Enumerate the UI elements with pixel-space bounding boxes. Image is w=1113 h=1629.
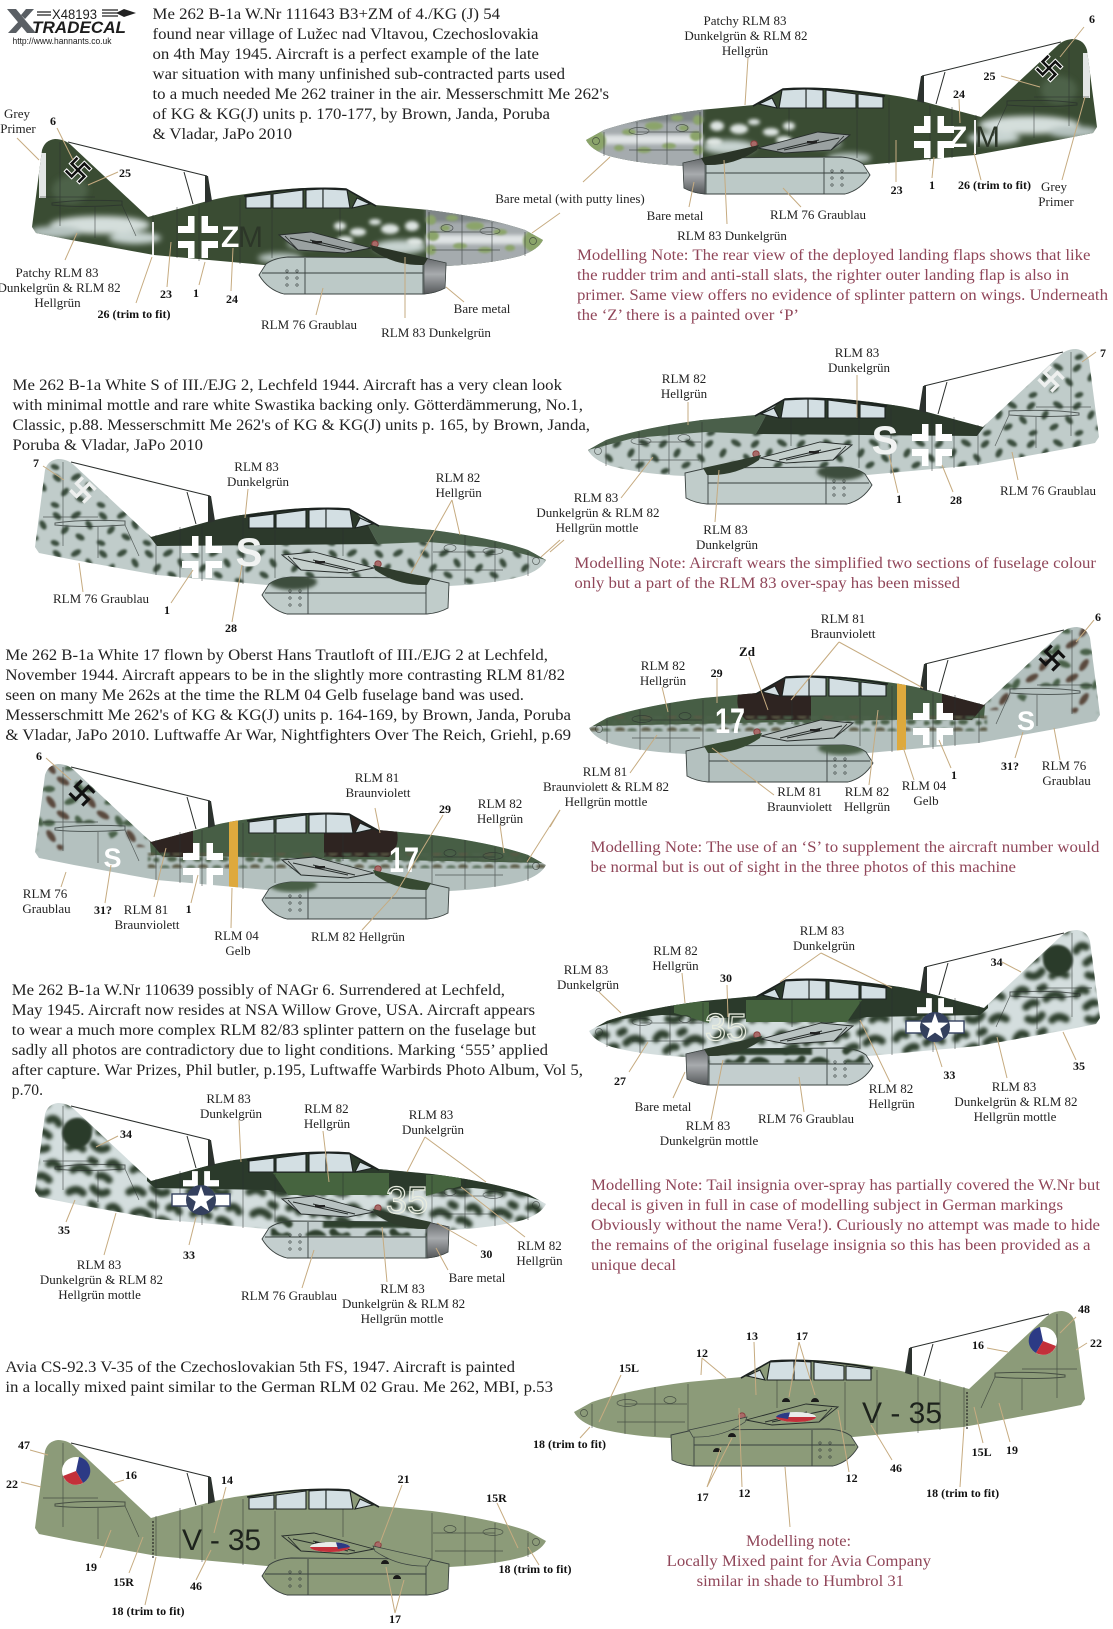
label: 15L tail: 15L <box>972 1445 992 1459</box>
label: mottle rear: Hellgrün mottle <box>974 1109 1057 1124</box>
leader lines <box>17 128 560 318</box>
label: RLM 81 top: RLM 81 <box>821 611 865 626</box>
label: RLM 76: RLM 76 Graublau <box>758 1111 855 1126</box>
label: 18 trim nose: 18 (trim to fit) <box>533 1437 606 1451</box>
logo: Xtradecal: X48193 <box>52 6 97 22</box>
text block: aircraft 7 description: May 1945. Aircraft now resides at NSA Willow Grove, USA. Aircraft appears <box>12 1002 535 1019</box>
label: RLM 83 top: Dunkelgrün <box>793 938 856 953</box>
label: mottle: Hellgrün mottle <box>565 794 648 809</box>
label: mottle: Hellgrün mottle <box>556 520 639 535</box>
callouts: aircraft 5 <box>22 749 560 958</box>
aircraft 2: B3+ZM facing left <box>583 39 1100 194</box>
label: grey primer: Primer <box>0 121 36 136</box>
text block: aircraft 9 description <box>5 1359 553 1396</box>
label: RLM 81: Braunviolett <box>346 785 411 800</box>
text block: aircraft 1 description: found near village of Lužec nad Vltavou, Czechoslovakia <box>152 26 538 43</box>
label: RLM 04: RLM 04 <box>214 928 259 943</box>
label: RLM 82 lower: RLM 82 Hellgrün <box>311 929 405 944</box>
label: 7: 7 <box>1100 346 1106 360</box>
leader lines <box>550 352 1096 552</box>
text block: aircraft 3 description: Classic, p.88. Messerschmitt Me 262's of KG & KG(J) units p. 165, by Brown, Janda, <box>12 417 590 434</box>
aircraft 2: B3+ZM facing left: Z <box>949 121 967 154</box>
label: RLM 81 top: Braunviolett <box>810 626 876 641</box>
label: patchy: Patchy RLM 83 <box>703 13 787 28</box>
label: Zd: Zd <box>739 644 756 659</box>
callouts: aircraft 10 <box>533 1302 1102 1527</box>
label: mottle: RLM 81 <box>583 764 627 779</box>
aircraft 7: 35 in US markings facing right: 35 <box>386 1180 428 1222</box>
label: 25: 25 <box>984 69 996 83</box>
label: mottle: RLM 83 <box>574 490 618 505</box>
label: 27: 27 <box>614 1074 626 1088</box>
aircraft 8: 35 in US markings facing left: 35 <box>705 1007 747 1049</box>
aircraft 1: B3+ZM facing right: M <box>238 221 263 254</box>
label: RLM 76: RLM 76 Graublau <box>261 317 358 332</box>
leader lines <box>66 1120 525 1288</box>
aircraft 8: 35 in US markings facing left <box>582 926 1102 1085</box>
callouts: aircraft 9 <box>6 1438 571 1626</box>
text block: aircraft 1 description: of KG & KG(J) units p. 170-177, by Brown, Janda, Poruba <box>152 106 550 123</box>
modelling note 4 <box>591 1177 1101 1274</box>
aircraft 3: White S facing right: S <box>236 531 262 575</box>
modelling note 1: the rudder trim and anti-stall slats, the righter outer landing flap is also in <box>577 267 1069 284</box>
label: RLM 82 nose: Hellgrün <box>516 1253 563 1268</box>
label: RLM 82 top: Hellgrün <box>640 673 687 688</box>
label: RLM 76: RLM 76 Graublau <box>241 1288 338 1303</box>
text block: aircraft 1 description: & Vladar, JaPo 2010 <box>152 126 292 143</box>
label: 17: 17 <box>389 1612 401 1626</box>
modelling note 2 <box>574 555 1097 592</box>
label: 18 trim nose: 18 (trim to fit) <box>499 1562 571 1576</box>
label: 23: 23 <box>160 287 172 301</box>
modelling note 4: the remains of the original fuselage insignia so this has been provided as a <box>591 1237 1090 1254</box>
label: mottle rear: Hellgrün mottle <box>58 1287 141 1302</box>
label: RLM 83 nose: RLM 83 <box>564 962 608 977</box>
label: RLM 76: Graublau <box>1042 773 1091 788</box>
aircraft 5: White 17 facing right <box>33 760 550 919</box>
leader lines <box>583 27 1085 224</box>
aircraft 6: White 17 facing left <box>585 623 1102 782</box>
text block: aircraft 3 description: Poruba & Vladar, JaPo 2010 <box>12 437 203 454</box>
label: RLM 82: RLM 82 <box>436 470 480 485</box>
label: 25: 25 <box>119 166 131 180</box>
label: RLM 04: Gelb <box>225 943 251 958</box>
label: RLM 76: RLM 76 <box>23 886 67 901</box>
label: 13: 13 <box>746 1329 758 1343</box>
label: 24: 24 <box>953 87 965 101</box>
label: 22: 22 <box>1090 1336 1102 1350</box>
label: patchy: Hellgrün <box>34 295 81 310</box>
label: mottle rear: Dunkelgrün & RLM 82 <box>40 1272 163 1287</box>
modelling note 5 <box>667 1533 931 1590</box>
leader lines <box>43 466 560 622</box>
label: RLM 83 nose: Dunkelgrün <box>557 977 620 992</box>
text block: aircraft 5 description: & Vladar, JaPo 2010. Luftwaffe Ar War, Nightfighters Over The Reich, Griehl, p.69 <box>5 727 571 744</box>
text block: aircraft 7 description: to wear a much more complex RLM 82/83 splinter pattern on the fuselage but <box>12 1022 537 1039</box>
leader lines <box>21 1450 539 1613</box>
label: RLM 83 mottle: RLM 83 <box>686 1118 730 1133</box>
modelling note 3: Modelling Note: The use of an ‘S’ to supplement the aircraft number would <box>590 839 1099 856</box>
text block: aircraft 1 description: to a much needed Me 262 trainer in the air. Messerschmitt Me 262's <box>152 86 609 103</box>
text block: aircraft 3 description <box>12 377 590 454</box>
callouts: aircraft 1 <box>0 106 645 340</box>
label: RLM 82: RLM 82 <box>478 796 522 811</box>
label: RLM 04: Gelb <box>913 793 939 808</box>
modelling note 3 <box>590 839 1099 876</box>
aircraft 6: White 17 facing left: 17 <box>715 702 745 741</box>
aircraft 10: Avia V-35 facing left: V - 35 <box>862 1397 942 1430</box>
label: RLM 83: Dunkelgrün <box>828 360 891 375</box>
label: 12 wing: 12 <box>846 1471 858 1485</box>
label: patchy: Patchy RLM 83 <box>15 265 99 280</box>
label: 6: 6 <box>50 114 56 128</box>
label: 35: 35 <box>1073 1059 1085 1073</box>
label: RLM 82 first: RLM 82 <box>304 1101 349 1116</box>
label: RLM 83: RLM 83 Dunkelgrün <box>381 325 491 340</box>
aircraft 7: 35 in US markings facing right <box>33 1099 553 1258</box>
text block: aircraft 1 description: Me 262 B-1a W.Nr 111643 B3+ZM of 4./KG (J) 54 <box>152 6 500 23</box>
label: 16: 16 <box>972 1338 984 1352</box>
logo: Xtradecal: TRADECAL <box>32 18 126 37</box>
label: bare metal: Bare metal <box>449 1270 506 1285</box>
callouts: aircraft 6 <box>543 610 1101 827</box>
leader lines <box>46 758 560 930</box>
aircraft 1: B3+ZM facing right: Z <box>221 221 239 254</box>
text block: aircraft 5 description: seen on many Me 262s at the time the RLM 04 Gelb fuselage band was used. <box>5 687 524 704</box>
modelling note 1: Modelling Note: The rear view of the deployed landing flaps shows that like <box>577 247 1090 264</box>
label: 1: 1 <box>929 178 935 192</box>
modelling note 1: primer. Same view offers no evidence of splinter pattern on wings. Underneath <box>577 287 1108 304</box>
logo: Xtradecal: http://www.hannants.co.uk <box>12 36 112 46</box>
label: 7: 7 <box>33 456 39 470</box>
label: mottle: Dunkelgrün & RLM 82 <box>536 505 660 520</box>
label: 29: 29 <box>439 802 451 816</box>
aircraft 9: Avia V-35 facing right: V - 35 <box>182 1524 261 1557</box>
text block: aircraft 7 description: p.70. <box>12 1082 43 1099</box>
label: RLM 83 second: Dunkelgrün <box>402 1122 465 1137</box>
label: 1: 1 <box>896 492 902 506</box>
aircraft 5: White 17 facing right: S <box>103 843 122 873</box>
label: 6: 6 <box>36 749 42 763</box>
label: RLM 82 nose: RLM 82 <box>517 1238 562 1253</box>
modelling note 1: the ‘Z’ there is a painted over ‘P’ <box>577 307 799 324</box>
aircraft 4: White S facing left: S <box>872 419 898 463</box>
modelling note 2: Modelling Note: Aircraft wears the simplified two sections of fuselage colour <box>574 555 1097 572</box>
modelling note 5: Modelling note: <box>746 1533 851 1550</box>
label: RLM 82 lower: RLM 82 <box>869 1081 913 1096</box>
text block: aircraft 1 description <box>152 6 609 143</box>
label: 6: 6 <box>1089 12 1095 26</box>
modelling note 1 <box>577 247 1108 324</box>
label: bare metal: Bare metal <box>454 301 511 316</box>
label: 30: 30 <box>480 1247 492 1261</box>
label: mottle: Braunviolett & RLM 82 <box>543 779 669 794</box>
label: 31?: 31? <box>1001 759 1019 773</box>
text block: aircraft 3 description: with minimal mottle and rare white Swastika backing only. Götterdämmerung, No.1, <box>12 397 583 414</box>
label: RLM 83 lower: RLM 83 <box>703 522 748 537</box>
leader lines <box>599 953 1076 1120</box>
label: 17 top: 17 <box>796 1329 808 1343</box>
callouts: aircraft 4 <box>550 345 1106 552</box>
label: 12 top: 12 <box>696 1346 708 1360</box>
label: 46: 46 <box>190 1579 202 1593</box>
label: RLM 04: RLM 04 <box>902 778 946 793</box>
aircraft 2: B3+ZM facing left: M <box>975 121 1000 154</box>
label: RLM 83 first: RLM 83 <box>206 1091 251 1106</box>
aircraft 9: Avia V-35 facing right <box>35 1440 546 1595</box>
modelling note 4: Obviously without the name Vera!). Curiously no attempt was made to hide <box>591 1217 1100 1234</box>
aircraft 3: White S facing right <box>33 455 553 614</box>
label: RLM 82 lower: Hellgrün <box>868 1096 915 1111</box>
text block: aircraft 1 description: war situation with many unfinished sub-contracted parts used <box>152 66 565 83</box>
label: RLM 82 top: RLM 82 <box>653 943 698 958</box>
label: 18 trim tail: 18 (trim to fit) <box>926 1486 999 1500</box>
callouts: aircraft 8 <box>557 923 1085 1148</box>
text block: aircraft 5 description: Me 262 B-1a White 17 flown by Oberst Hans Trautloft of III./EJG 2 at Lechfeld, <box>5 647 548 664</box>
label: 29: 29 <box>711 666 723 680</box>
label: mottle rear: Dunkelgrün & RLM 82 <box>954 1094 1078 1109</box>
label: 33: 33 <box>943 1068 955 1082</box>
label: RLM 83: RLM 83 <box>835 345 879 360</box>
text block: aircraft 7 description <box>12 982 583 1099</box>
label: RLM 82 lower: Hellgrün <box>844 799 891 814</box>
label: mottle engine: Hellgrün mottle <box>361 1311 444 1326</box>
label: grey primer: Grey <box>4 106 30 121</box>
label: 23: 23 <box>891 183 903 197</box>
label: RLM 82 top: Hellgrün <box>652 958 699 973</box>
modelling note 4: Modelling Note: Tail insignia over-spray has partially covered the W.Nr but <box>591 1177 1101 1194</box>
label: 34: 34 <box>991 955 1003 969</box>
modelling note 4: unique decal <box>591 1257 677 1274</box>
text block: aircraft 5 description: Messerschmitt Me 262's of KG & KG(J) units p. 164-169, by Brown, Janda, Poruba <box>5 707 571 724</box>
label: RLM 76: RLM 76 <box>1042 758 1086 773</box>
label: RLM 83 mottle: Dunkelgrün mottle <box>660 1133 759 1148</box>
label: RLM 82: Hellgrün <box>661 386 708 401</box>
label: 30: 30 <box>720 971 732 985</box>
label: RLM 82 first: Hellgrün <box>304 1116 351 1131</box>
label: RLM 81 lower: RLM 81 <box>124 902 168 917</box>
aircraft 1: B3+ZM facing right <box>29 139 546 294</box>
callouts: aircraft 3 <box>33 456 660 635</box>
label: 17 lower: 17 <box>697 1490 709 1504</box>
text block: aircraft 1 description: on 4th May 1945. Aircraft is a perfect example of the late <box>152 46 539 63</box>
label: RLM 81 lower: Braunviolett <box>114 917 180 932</box>
label: 26: 26 (trim to fit) <box>98 307 170 321</box>
label: RLM 81 lower: RLM 81 <box>777 784 822 799</box>
label: RLM 76: RLM 76 Graublau <box>53 591 150 606</box>
label: 12 lower: 12 <box>738 1486 750 1500</box>
text block: aircraft 7 description: Me 262 B-1a W.Nr 110639 possibly of NAGr 6. Surrendered at Lechfeld, <box>12 982 505 999</box>
text block: aircraft 9 description: Avia CS-92.3 V-35 of the Czechoslovakian 5th FS, 1947. Aircraft is painted <box>5 1359 515 1376</box>
label: mottle engine: RLM 83 <box>380 1281 425 1296</box>
label: RLM 76: RLM 76 Graublau <box>1000 483 1097 498</box>
label: 6: 6 <box>1095 610 1101 624</box>
text block: aircraft 5 description <box>5 647 571 744</box>
label: 14: 14 <box>221 1473 233 1487</box>
modelling note 5: similar in shade to Humbrol 31 <box>697 1573 904 1590</box>
label: 28: 28 <box>950 493 962 507</box>
label: RLM 83 second: RLM 83 <box>409 1107 453 1122</box>
text block: aircraft 7 description: after capture. War Prizes, Phil butler, p.195, Luftwaffe Warbirds Photo Album, Vol 5, <box>12 1062 583 1079</box>
label: 22: 22 <box>6 1477 18 1491</box>
modelling note 2: only but a part of the RLM 83 over-spay has been missed <box>574 575 960 592</box>
label: patchy: Dunkelgrün & RLM 82 <box>684 28 808 43</box>
label: 28: 28 <box>225 621 237 635</box>
label: RLM 82: Hellgrün <box>477 811 524 826</box>
label: 19: 19 <box>1006 1443 1018 1457</box>
label: 15L nose: 15L <box>619 1361 639 1375</box>
leader lines <box>580 1317 1087 1527</box>
label: RLM 83 first: Dunkelgrün <box>200 1106 263 1121</box>
modelling note 4: decal is given in full in case of modelling subject in German markings <box>591 1197 1063 1214</box>
label: 31?: 31? <box>94 903 112 917</box>
label: RLM 82: RLM 82 <box>662 371 706 386</box>
label: patchy: Hellgrün <box>722 43 769 58</box>
label: 16: 16 <box>125 1468 137 1482</box>
label: grey primer: Grey <box>1041 179 1067 194</box>
label: grey primer: Primer <box>1038 194 1074 209</box>
text block: aircraft 7 description: sadly all photos are contradictory due to light conditions. Marking ‘555’ applied <box>12 1042 548 1059</box>
label: 19: 19 <box>85 1560 97 1574</box>
label: bare metal: Bare metal <box>635 1099 692 1114</box>
label: 1: 1 <box>951 768 957 782</box>
label: 15R nose: 15R <box>486 1491 507 1505</box>
label: bare metal: Bare metal <box>647 208 704 223</box>
label: 1: 1 <box>186 902 192 916</box>
text block: aircraft 5 description: November 1944. Aircraft appears to be in the slightly more contrasting RLM 81/82 <box>5 667 565 684</box>
label: 26: 26 (trim to fit) <box>958 178 1031 192</box>
label: RLM 83 top: RLM 83 <box>800 923 844 938</box>
label: 47: 47 <box>18 1438 30 1452</box>
label: RLM 81: RLM 81 <box>355 770 399 785</box>
leader lines <box>550 620 1094 827</box>
logo: Xtradecal <box>7 6 136 46</box>
label: mottle engine: Dunkelgrün & RLM 82 <box>342 1296 465 1311</box>
label: 1: 1 <box>164 603 170 617</box>
label: RLM 82 lower: RLM 82 <box>845 784 889 799</box>
label: RLM 83: RLM 83 Dunkelgrün <box>677 228 787 243</box>
text block: aircraft 3 description: Me 262 B-1a White S of III./EJG 2, Lechfeld 1944. Aircraft has a very clean look <box>12 377 562 394</box>
label: RLM 76: RLM 76 Graublau <box>770 207 867 222</box>
label: mottle rear: RLM 83 <box>77 1257 121 1272</box>
label: RLM 82: Hellgrün <box>435 485 482 500</box>
label: 18 trim tail: 18 (trim to fit) <box>112 1604 184 1618</box>
label: 35: 35 <box>58 1223 70 1237</box>
label: RLM 83: RLM 83 <box>234 459 279 474</box>
modelling note 5: Locally Mixed paint for Avia Company <box>667 1553 931 1570</box>
label: 21: 21 <box>398 1472 410 1486</box>
aircraft 10: Avia V-35 facing left <box>574 1311 1085 1466</box>
label: 33: 33 <box>183 1248 195 1262</box>
label: patchy: Dunkelgrün & RLM 82 <box>0 280 121 295</box>
label: mottle rear: RLM 83 <box>992 1079 1036 1094</box>
label: 24: 24 <box>226 292 238 306</box>
label: RLM 83 lower: Dunkelgrün <box>696 537 759 552</box>
label: RLM 81 lower: Braunviolett <box>767 799 832 814</box>
callouts: aircraft 2 <box>583 12 1095 243</box>
label: 46: 46 <box>890 1461 902 1475</box>
callouts: aircraft 7 <box>40 1091 563 1326</box>
aircraft 6: White 17 facing left: S <box>1017 706 1035 736</box>
label: 48: 48 <box>1078 1302 1090 1316</box>
modelling note 3: be normal but is out of sight in the three photos of this machine <box>590 859 1016 876</box>
label: RLM 83: Dunkelgrün <box>227 474 290 489</box>
label: 34: 34 <box>120 1127 132 1141</box>
aircraft 5: White 17 facing right: 17 <box>389 841 419 880</box>
label: RLM 76: Graublau <box>22 901 71 916</box>
label: 15R tail: 15R <box>113 1575 134 1589</box>
label: RLM 82 top: RLM 82 <box>641 658 685 673</box>
label: 1: 1 <box>193 286 199 300</box>
aircraft 4: White S facing left <box>581 345 1101 504</box>
label: bare metal with putty lines: Bare metal (with putty lines) <box>495 191 645 206</box>
text block: aircraft 9 description: in a locally mixed paint similar to the German RLM 02 Grau. Me 262, MBI, p.53 <box>5 1379 553 1396</box>
